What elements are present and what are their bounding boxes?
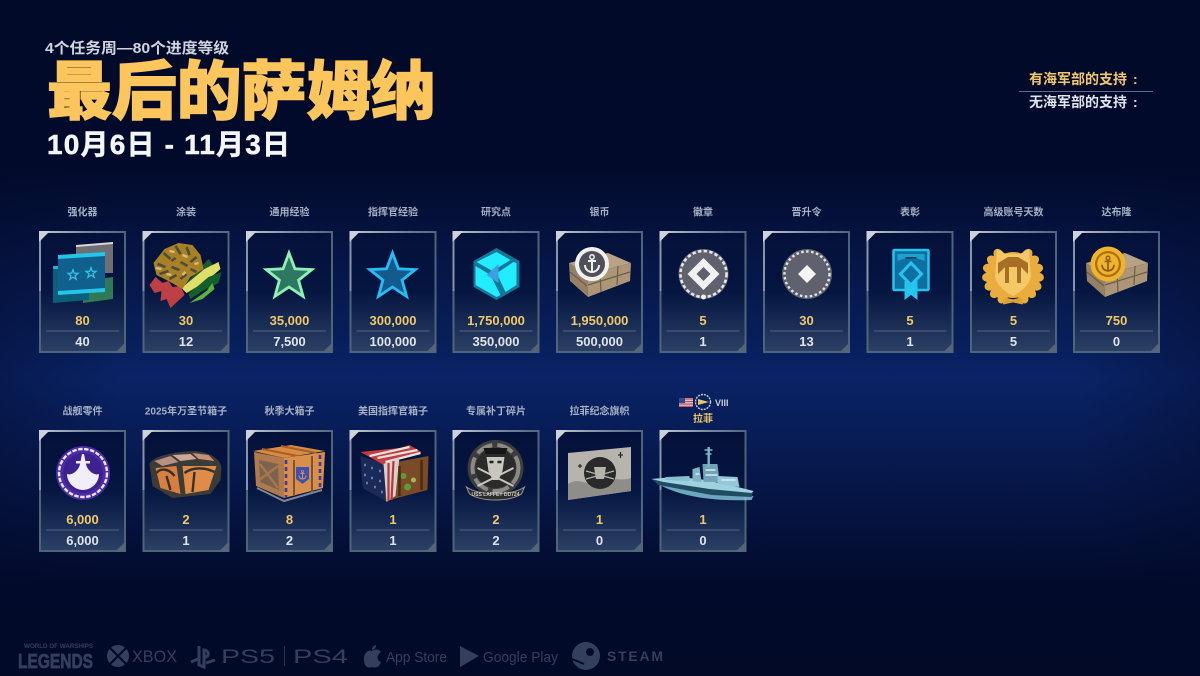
icon: credits crate: [569, 247, 631, 297]
date range: 10月6日 - 11月3日: [47, 129, 290, 160]
value with admiralty: 5: [699, 313, 707, 328]
panel: camouflage: 涂装: [176, 206, 196, 218]
value with admiralty: 5: [1010, 313, 1017, 328]
value without admiralty: 2: [492, 533, 500, 548]
value without admiralty: 1: [699, 334, 707, 349]
panel: badges: 徽章: [693, 206, 713, 218]
value without admiralty: 13: [799, 334, 814, 349]
value without admiralty: 100,000: [370, 334, 416, 349]
title: 最后的萨姆纳: [47, 56, 436, 128]
icon: US flag: [679, 398, 693, 407]
panel: warship parts: 战舰零件: [62, 404, 102, 418]
legend: without admiralty support: :: [1133, 94, 1138, 110]
panel: promotion tokens: [763, 206, 850, 353]
value without admiralty: 350,000: [472, 334, 520, 349]
logo: Steam: [572, 642, 663, 670]
panel: laffey commemorative flag: 拉菲纪念旗帜: [570, 404, 630, 418]
footer platform logos: [18, 642, 663, 673]
icon: camouflage swatches: [150, 243, 222, 308]
value with admiralty: 750: [1106, 313, 1127, 328]
logo: Xbox: XBOX: [132, 647, 177, 666]
panel: common XP: [246, 206, 333, 353]
value without admiralty: 5: [1010, 334, 1017, 349]
legend: with admiralty support: 有海军部的支持: [1029, 71, 1127, 87]
legend: with admiralty support: :: [1133, 71, 1138, 87]
panel: american commander container: [350, 404, 436, 552]
icon: patch: USS LAFFEY DD724: [472, 492, 520, 498]
value with admiralty: 80: [75, 313, 90, 328]
panel: premium days: [970, 206, 1057, 353]
value without admiralty: 2: [286, 533, 293, 548]
legend: [1019, 71, 1153, 110]
logo: World of Warships Legends: LEGENDS: [18, 651, 93, 673]
value without admiralty: 0: [1113, 334, 1120, 349]
logo: Google Play: [460, 646, 558, 667]
value with admiralty: 2: [492, 512, 500, 527]
panel: doubloons: 达布隆: [1102, 206, 1132, 218]
value with admiralty: 1: [699, 512, 707, 527]
value with admiralty: 30: [799, 313, 814, 328]
icon: patch: [466, 440, 524, 500]
logo: App Store: App Store: [386, 649, 447, 666]
panel: research points: [452, 206, 540, 353]
value without admiralty: 12: [179, 334, 193, 349]
panel: badges: [660, 206, 746, 353]
panel: camouflage: [142, 206, 230, 353]
icon: citation: [894, 250, 928, 300]
value without admiralty: 1: [182, 533, 190, 548]
logo: App Store: [364, 645, 447, 667]
value with admiralty: 1,750,000: [467, 313, 525, 328]
value without admiralty: 7,500: [273, 334, 306, 349]
ship header: [679, 394, 729, 425]
icon: green star: [266, 253, 312, 296]
value with admiralty: 300,000: [370, 313, 416, 328]
subtitle: 4个任务周—80个进度等级: [45, 39, 229, 57]
value with admiralty: 6,000: [66, 512, 99, 527]
panel: commander XP: 指挥官经验: [368, 206, 418, 218]
logo: PS5 and PS4: [191, 646, 349, 668]
panel: premium days: 高级账号天数: [984, 206, 1044, 218]
icon: ship: [652, 447, 754, 500]
panel: halloween container: [142, 404, 230, 552]
value with admiralty: 1: [389, 512, 397, 527]
panel: american commander container: 美国指挥官箱子: [358, 404, 428, 418]
panel: doubloons: [1073, 206, 1160, 353]
icon: badge medal: [678, 249, 728, 300]
icon: premium wreath: [982, 247, 1044, 305]
panel: common XP: 通用经验: [270, 206, 310, 218]
icon: halloween chest: [150, 451, 222, 498]
logo: World of Warships Legends: [18, 644, 93, 673]
panel: research points: 研究点: [481, 206, 511, 218]
value with admiralty: 2: [182, 512, 190, 527]
panel: halloween container: 2025年万圣节箱子: [145, 404, 227, 418]
panel: boosters: [39, 206, 126, 353]
ship name: 拉菲: [693, 412, 713, 425]
icon: autumn crate: [253, 445, 325, 501]
icon: research hexagon: [474, 248, 520, 300]
icon: american crate: [360, 445, 428, 502]
value without admiralty: 0: [699, 533, 707, 548]
panel: laffey ship: [652, 430, 754, 552]
value without admiralty: 6,000: [66, 533, 99, 548]
panel: autumn big container: 秋季大箱子: [264, 404, 314, 418]
logo: PS5 and PS4: PS5: [221, 647, 275, 668]
panel: promotion tokens: 晋升令: [792, 206, 822, 218]
value without admiralty: 0: [596, 533, 603, 548]
value without admiralty: 500,000: [576, 334, 623, 349]
panel: credits: 银币: [590, 206, 610, 218]
logo: World of Warships Legends: WORLD OF WARSHIPS: [24, 644, 93, 650]
icon: blue star: [370, 253, 415, 296]
icon: flags: [53, 242, 113, 303]
ship tier: VIII: [715, 398, 729, 408]
panel: commendations: [866, 206, 954, 353]
icon: commemorative flag: [568, 447, 631, 500]
panel: exclusive patch fragments: [452, 404, 540, 552]
value without admiralty: 40: [75, 334, 90, 349]
panel: exclusive patch fragments: 专属补丁碎片: [466, 404, 526, 418]
icon: warship parts: [56, 446, 110, 500]
panel: commendations: 表彰: [900, 206, 920, 218]
value with admiralty: 8: [286, 512, 293, 527]
panel: commander XP: [350, 206, 436, 353]
value with admiralty: 5: [906, 313, 914, 328]
logo: Xbox: [107, 645, 177, 667]
value with admiralty: 35,000: [270, 313, 309, 328]
panel: credits: [556, 206, 643, 353]
icon: destroyer class emblem: [696, 394, 710, 410]
value with admiralty: 30: [179, 313, 193, 328]
icon: promotion token: [782, 249, 832, 299]
value with admiralty: 1,950,000: [571, 313, 628, 328]
panel: autumn big container: [246, 404, 333, 552]
value without admiralty: 1: [906, 334, 914, 349]
icon: doubloon crate: [1086, 246, 1148, 297]
value without admiralty: 1: [389, 533, 397, 548]
panel: warship parts: [39, 404, 126, 552]
logo: Google Play: Google Play: [483, 649, 558, 666]
logo: PS5 and PS4: PS4: [293, 647, 349, 668]
value with admiralty: 1: [596, 512, 603, 527]
legend: without admiralty support: 无海军部的支持: [1029, 94, 1127, 110]
logo: Steam: STEAM: [607, 648, 663, 664]
panel: boosters: 强化器: [68, 206, 98, 218]
panel: laffey commemorative flag: [556, 404, 643, 552]
